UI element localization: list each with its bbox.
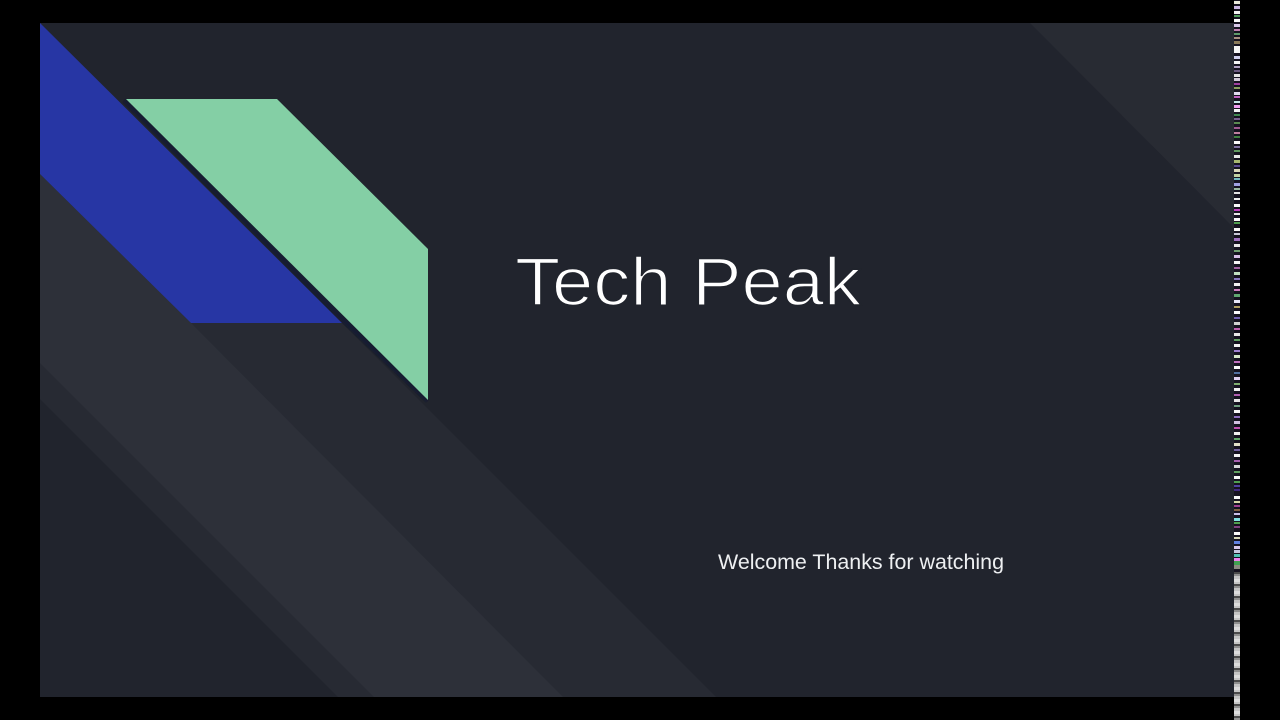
background band: outer diagonal xyxy=(40,174,716,697)
green diagonal shape xyxy=(126,99,428,400)
background band: top right xyxy=(1030,23,1234,228)
shadow under green shape xyxy=(123,99,428,402)
title: Tech Peak: Tech Peak xyxy=(515,244,862,320)
subtitle: Welcome Thanks for watching: Welcome Thanks for watching xyxy=(718,551,1004,574)
background band: inner diagonal xyxy=(40,174,563,697)
blue diagonal shape xyxy=(40,23,342,323)
noise strip at right edge xyxy=(1234,0,1240,720)
